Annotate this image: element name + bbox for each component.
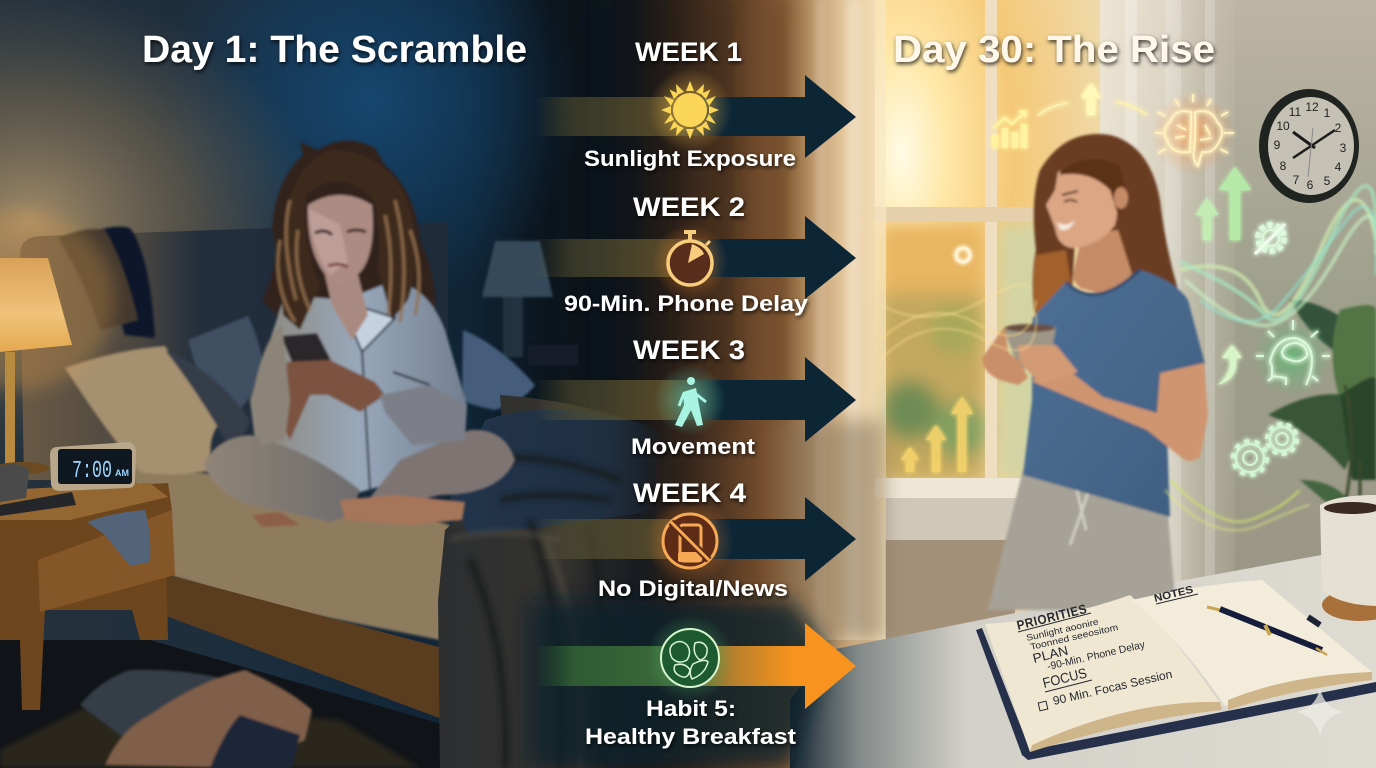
open notebook with notes (976, 580, 1376, 760)
notebook handwriting: -90-Min. Phone Delay (1046, 639, 1147, 673)
icon: upward arrow and arcs (1038, 83, 1147, 115)
icon: gears (1233, 424, 1297, 475)
icon: walking person (654, 364, 726, 436)
blanket on headboard (58, 227, 155, 338)
green and gold energy waves (880, 186, 1376, 530)
alarm clock 7:00 AM: AM (115, 468, 129, 478)
wall clock: 12 (1305, 100, 1319, 114)
front hair strands (282, 150, 416, 330)
wooden bed frame (150, 570, 450, 722)
icon: sun (648, 68, 732, 152)
label: movement: Movement (631, 434, 756, 459)
floor (0, 640, 445, 768)
wall clock: 11 (1289, 105, 1302, 119)
icon: no phone (646, 497, 734, 585)
feet (340, 495, 465, 525)
phone (281, 333, 332, 372)
icon: head with brain (1252, 317, 1332, 397)
dark band behind lower arrows (530, 600, 830, 768)
face (308, 195, 373, 283)
wall clock: 1 (1324, 106, 1331, 120)
pants (988, 470, 1176, 610)
arrow: week 1 (535, 75, 856, 158)
icon: healthy food plate (646, 614, 734, 702)
back hair (1033, 134, 1178, 316)
wall clock: 4 (1335, 160, 1342, 174)
pen (1207, 607, 1327, 655)
alarm clock 7:00 AM (50, 442, 136, 491)
curtain folds dark (590, 0, 788, 420)
panel: Day 1 dark bedroom scene (0, 0, 788, 768)
right sheer curtain (1100, 0, 1235, 640)
headboard (20, 222, 448, 480)
icon: green up arrows (1196, 167, 1251, 240)
other hand (982, 326, 1028, 385)
wall clock: 9 (1274, 138, 1281, 152)
labels (564, 37, 809, 749)
notebook handwriting: PRIORITIES (1015, 601, 1089, 633)
icon: gear with slash (1255, 224, 1285, 254)
icon: growth chart (992, 110, 1027, 148)
arrow: week 4 (535, 497, 856, 581)
arrow: week 2 (535, 216, 856, 299)
wall clock: 6 (1307, 178, 1314, 192)
icon: glowing brain (1151, 91, 1235, 175)
heading: week 1: WEEK 1 (635, 37, 742, 67)
wall clock: 3 (1340, 141, 1347, 155)
icon: curved green arrow (1217, 345, 1242, 385)
label: sunlight exposure: Sunlight Exposure (584, 146, 796, 171)
left sheer curtain (780, 0, 886, 640)
nightstand (0, 464, 175, 710)
arrow: habit 5 (535, 623, 856, 709)
hair back (262, 140, 435, 336)
blue pillow right (462, 330, 535, 410)
label: habit 5: Habit 5: (646, 696, 736, 721)
label: no digital: No Digital/News (598, 576, 788, 601)
coffee mug on coaster (1320, 495, 1376, 621)
face (1046, 167, 1117, 248)
ear and hair over forehead (1060, 159, 1128, 215)
neck (325, 275, 368, 340)
hands and arms (282, 360, 385, 440)
window with sunlight (875, 0, 1100, 510)
neck (1072, 230, 1132, 296)
arrow: week 3 (535, 357, 856, 442)
icon: stopwatch (652, 224, 728, 300)
notebook handwriting: FOCUS (1041, 664, 1088, 691)
notebook handwriting: 90 Min. Focas Session (1052, 667, 1174, 708)
alarm clock 7:00 AM: 7:00 (72, 458, 112, 485)
lamp (0, 210, 115, 474)
icon: yellow window arrows (901, 397, 973, 472)
notebook handwriting: NOTES (1153, 584, 1195, 605)
panel: weekly habit arrows (530, 37, 856, 768)
wall clock: 2 (1335, 121, 1342, 135)
notebook handwriting: PLAN (1031, 643, 1070, 666)
notebook handwriting (1015, 584, 1198, 711)
clothes pile (80, 670, 312, 768)
window frame (875, 0, 1105, 650)
wall clock: 8 (1280, 159, 1287, 173)
right page (1132, 580, 1372, 706)
wall clock (1259, 89, 1359, 203)
mattress and sheet (130, 465, 450, 640)
arm and hand right (1033, 352, 1208, 461)
right wall (1100, 0, 1376, 650)
label: healthy breakfast: Healthy Breakfast (585, 724, 797, 749)
wall clock: 5 (1324, 174, 1331, 188)
heading: week 2: WEEK 2 (633, 192, 745, 222)
title: day 1: Day 1: The Scramble (142, 29, 527, 71)
woman with coffee (982, 134, 1208, 610)
left page (985, 595, 1222, 752)
wall clock: 10 (1276, 119, 1290, 133)
rug (0, 700, 420, 768)
blue pillow (188, 316, 265, 410)
pajama top (250, 280, 467, 495)
wall clock: 7 (1293, 173, 1300, 187)
desk (790, 545, 1376, 768)
woman on bed with phone (204, 140, 515, 527)
notebook handwriting: Sunlight aoonire (1025, 617, 1100, 643)
garden foliage in lower panes (878, 222, 1067, 480)
icon: small ring (956, 248, 970, 262)
dim lamp on right (482, 241, 578, 365)
panel: Day 30 bright room scene (780, 0, 1376, 768)
label: phone delay: 90-Min. Phone Delay (564, 291, 809, 316)
title: day 30: Day 30: The Rise (893, 29, 1215, 71)
plant (1268, 300, 1376, 510)
notebook handwriting: Toonned seeositom (1029, 622, 1119, 652)
coffee cup (1004, 325, 1056, 369)
beige pillow (65, 346, 250, 475)
crossed legs (204, 435, 360, 522)
heading: week 4: WEEK 4 (633, 478, 746, 508)
dark duvet (438, 395, 660, 768)
heading: week 3: WEEK 3 (633, 335, 745, 365)
t-shirt (1023, 270, 1205, 517)
sparkle watermark (1296, 688, 1344, 736)
cover (976, 628, 1376, 760)
